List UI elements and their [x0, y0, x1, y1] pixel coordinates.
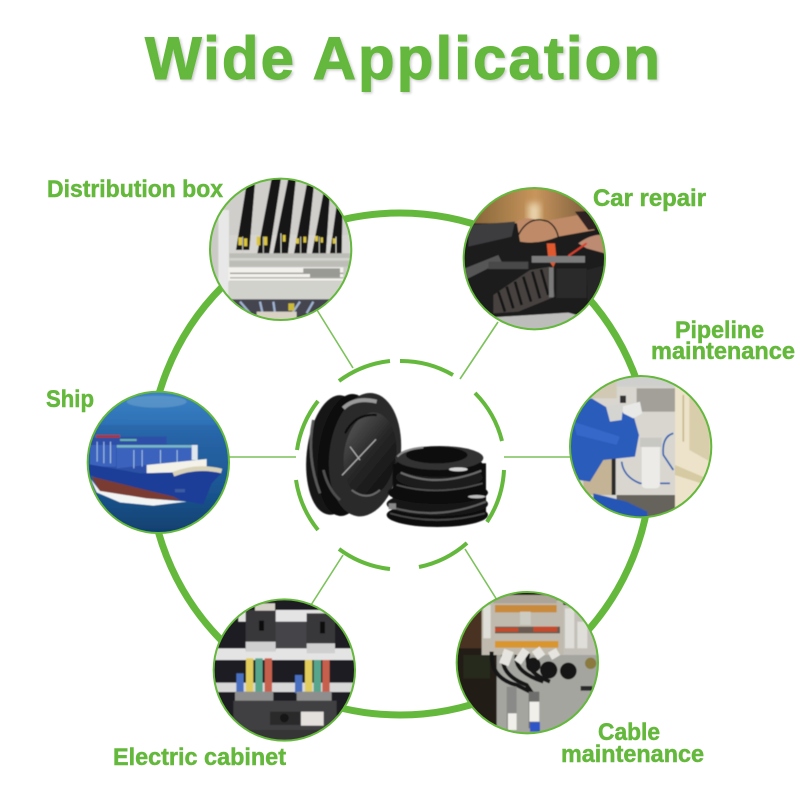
label: car repair: Car repair: [593, 185, 706, 212]
label: cable maintenance: maintenance: [561, 741, 704, 768]
outer connecting ring: [149, 213, 651, 715]
label: pipeline maintenance: [651, 317, 795, 365]
label: electric cabinet: Electric cabinet: [113, 744, 286, 771]
large grommet: [301, 389, 408, 521]
label: cable maintenance: [561, 719, 704, 768]
label: pipeline maintenance: Pipeline: [675, 317, 764, 344]
label: cable maintenance: Cable: [598, 719, 660, 746]
photo: electric cabinet: [212, 598, 356, 742]
label: pipeline maintenance: maintenance: [651, 338, 795, 365]
small grommet stack: [387, 446, 488, 527]
photo: cable maintenance: [456, 591, 599, 734]
title: Wide Application: [145, 25, 660, 92]
photo: ship: [86, 390, 230, 534]
label: distribution box: Distribution box: [47, 176, 224, 203]
photo: distribution box: [209, 178, 352, 321]
photo: car repair: [462, 187, 606, 330]
inner dashed ring: [296, 361, 504, 569]
connector lines: [229, 310, 572, 605]
label: ship: Ship: [46, 386, 94, 413]
product: black rubber grommets: [301, 389, 488, 527]
photo: pipeline maintenance: [569, 375, 712, 518]
